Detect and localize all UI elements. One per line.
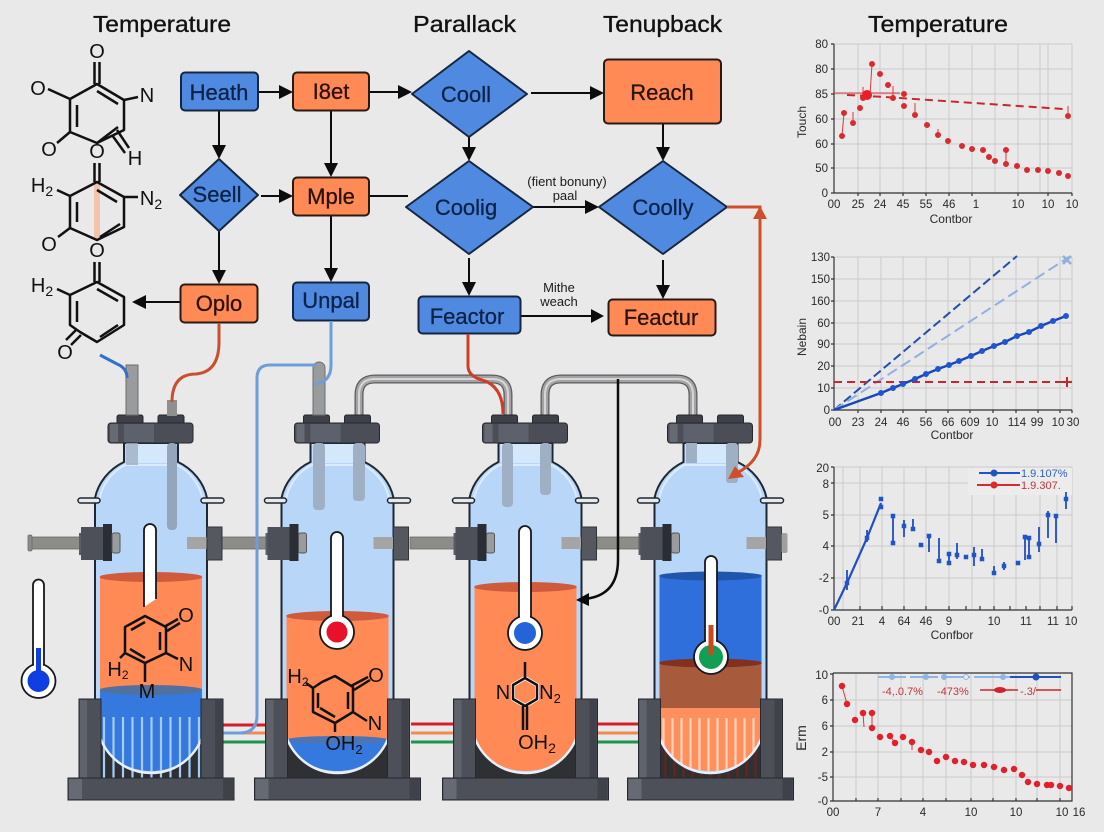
reactor 2 molecule [287,665,384,757]
chart 4 y labels: 6 [822,695,828,707]
chart 3 y labels [816,463,830,617]
label: middle note: Mithe [543,280,575,295]
chart 1 axis titles [795,106,972,226]
chart 3 x labels: 10 [1065,616,1077,628]
molecule: lower ring: H [31,275,45,297]
chart 4 x labels: 4 [920,807,927,819]
reactor 1 heater ribs [104,717,199,778]
chart 3 legend [968,468,1072,495]
chart 1 y labels: 60 [815,139,828,151]
chart 2 x labels [829,417,1079,429]
reactor 1 molecule: O [178,605,194,627]
node: mple [293,178,369,216]
node: iset [293,72,369,110]
chart 2 axes [831,257,1072,413]
chart 3 y labels: 4 [823,541,830,553]
node: coolig: Coolig [435,195,497,220]
chart 2 y labels: 10 [817,383,830,395]
node: oplo [180,284,258,322]
arrowhead: red up [753,206,767,219]
reactor 1 liquid [99,572,203,780]
node: mple: Mple [307,184,355,209]
chart 3 y labels: 5 [823,510,829,522]
chart 1 x labels: 10 [1012,199,1024,211]
chart 1 y labels: 60 [815,114,828,126]
chart 3 grid [834,467,1072,610]
chart 4: erm [793,670,1085,819]
molecule: middle ring [31,163,162,262]
flowchart [132,51,727,336]
chart 4 y labels: 10 [815,670,828,682]
chart 4 y labels: -0 [818,796,828,808]
chart 1 x labels: 45 [897,199,909,211]
node: heath: Heath [190,80,248,105]
node: reach: Reach [630,80,694,105]
node: cooll: Cooll [441,82,491,107]
chart 2 x labels: 56 [920,417,932,429]
chart 1 stems [834,64,1068,164]
chart 4 axes [830,673,1072,801]
heading: parallack: Parallack [413,11,517,37]
reactor 4 stand and vessel [628,415,794,800]
node: reach [604,60,721,124]
chart 2 axis titles: Nebain [795,318,809,356]
pipes between reactors [359,379,693,415]
chemical structures stack [30,41,162,364]
chart 1 y labels: 50 [815,163,828,175]
chart 1 y labels: 80 [815,64,828,76]
chart 1 x labels: 10 [1042,199,1054,211]
chart 3 x labels: 00 [828,616,840,628]
chart 3 y labels: -0 [819,605,829,617]
chart 1 axes [831,44,1072,196]
chart 2: nebain [795,252,1079,442]
reactor 3 molecule: OH [518,732,548,754]
label: branch note [527,174,607,203]
chart 1 y labels: 0 [822,188,828,200]
chart 3 y labels: -2 [819,573,829,585]
molecule: middle ring: 2 [45,183,53,199]
node: unpal: Unpal [302,288,360,313]
chart 4 x labels: 16 [1073,807,1085,819]
chart 4 legend: -.3/ [1020,686,1037,698]
molecule: top ring: O [30,78,46,100]
molecule: top ring: O [89,141,105,163]
chart 4 y labels: 6 [822,721,828,733]
chart 2 x labels: 10 [986,417,998,429]
chart 4 x labels: 7 [875,807,881,819]
chart 3 axis title: Confbor [931,628,973,642]
chart 1 data points [842,64,1068,176]
heading: temperature left: Temperature [93,11,231,37]
chart 4 stems [842,686,912,750]
reactor 2 molecule: 2 [355,742,363,757]
chart 1 grid [834,44,1072,193]
chart 2 y labels: 20 [817,361,830,373]
side rods [28,535,662,551]
arrow: heath to seell [212,111,226,159]
chart 1: touch [795,39,1078,226]
reactor 2 molecule: OH [325,733,355,755]
node: iset: I8et [313,79,349,104]
heading: temperature right: Temperature [868,11,1008,37]
node: unpal [293,282,369,320]
chart 4 legend [878,674,1061,698]
label: branch note: paal [553,188,577,203]
chart 1 x labels: 24 [874,199,887,211]
chart 2 grid [834,257,1072,410]
chart 2 x labels: 46 [897,417,909,429]
molecule: middle ring: H [31,175,45,197]
chart 3 x labels: 11 [1047,616,1059,628]
molecule: top ring: O [41,139,57,161]
chart 1 axis titles: Contbor [930,212,972,226]
reactor 1 stand and vessel [68,415,234,800]
connecting wires between reactors [223,724,639,742]
chart 2 axis titles: Contbor [931,428,973,442]
chart 3 data points [847,499,1066,583]
chart 2 y labels: 0 [824,405,830,417]
chart 2 x labels: 114 [1008,417,1027,429]
reactor 4 liquid [658,572,762,778]
reactor 2 tubes [313,362,365,510]
chart 2 blue series [834,316,1066,410]
chart 4 x labels: 10 [1010,807,1022,819]
chart 4 x labels: 10 [965,807,977,819]
chart 2 y labels: 90 [817,339,830,351]
chart 1 x labels: 10 [1066,199,1078,211]
chart 3 x labels: 4 [879,616,886,628]
arrow: coolig to coolly [533,200,599,214]
reactor 2 molecule: O [368,665,384,687]
molecule: middle ring: N [140,188,154,210]
node: feactur: Feactur [624,305,698,330]
chart 4 legend: -4,.0.7% [882,686,923,698]
reactor 1 molecule [107,605,194,703]
chart 3 x labels [828,616,1077,628]
reactor 1 molecule: N [179,654,193,676]
arrow: iset to cooll [369,85,412,99]
chart 1 highlight point [862,90,872,100]
label: middle note [539,280,578,309]
node: cooll [412,51,527,137]
arrow: coolig to feactor [462,258,476,296]
node: feactur [608,300,716,336]
connector: mple to coolig [369,195,408,197]
molecule: top ring [30,41,154,170]
reactor 1 tubes [126,365,177,530]
chart 4 axis title: Erm [793,725,809,751]
chart 2 x labels: 66 [942,417,954,429]
chart 3 y labels: 20 [816,463,829,475]
chart 3 x labels: 64 [898,616,911,628]
chart 1 x labels: 25 [852,199,864,211]
chart 1 x labels: 46 [943,199,955,211]
reactor 3 molecule [496,662,561,756]
chart 2 y labels: 150 [811,274,830,286]
reactor 2 molecule: 2 [302,675,309,689]
arrowhead: red into reactor 4 [728,466,744,479]
arrow: seell to oplo [212,231,226,284]
chart 3 x labels: 11 [1020,616,1032,628]
chart 3 legend: 1.9.307. [1021,480,1061,492]
node: coolly: Coolly [632,195,694,220]
molecule: top ring: N [140,85,154,107]
node: heath [181,72,258,110]
reactor 1 [68,365,234,800]
line: oplo to reactor 1 [172,323,219,402]
chart 1 y labels [815,39,828,200]
reactor 3 molecule: N [496,682,510,704]
chart 2 y labels: 60 [817,318,830,330]
chart 4 grid [833,674,1072,801]
chart 2 x labels: 30 [1067,417,1079,429]
reactor 1 molecule: 2 [122,668,129,682]
reactor 2 thermometer [320,532,354,649]
node: oplo: Oplo [196,291,242,316]
arrow: mple to unpal [324,216,338,282]
chart 2 red baseline [834,377,1072,387]
chart 4 x labels: 00 [827,807,839,819]
chart 3 x labels: 46 [920,616,932,628]
chart 4 x labels [827,807,1085,819]
arrow: feactor to feactur [521,309,604,323]
arrowhead: black into reactor 3 [576,593,589,606]
chart 4 data points [842,686,1069,788]
line: blue hook on reactor 1 [100,355,127,378]
chart 3 x labels: 21 [852,616,864,628]
line: reactor 2 tube to wire [224,365,316,733]
thermometer: outside left [22,580,56,698]
reactor 4 thermometer [694,556,728,674]
chart 1 x labels [828,199,1078,211]
chart 4 y labels: -5 [818,772,828,784]
arrow: heath to iset [258,85,293,99]
reactor 3 tubes [502,443,551,507]
arrow: cooll to coolig [462,137,476,161]
chart 3 legend: 1.9.107% [1021,468,1068,480]
chart 2 x labels: 10 [1052,417,1064,429]
chart 2 dashed lines [834,256,1071,410]
line: unpal to reactor 2 [315,321,331,384]
chart 2 y labels: 130 [811,252,830,264]
chart 3: confbor [816,463,1077,642]
molecule: middle ring: 2 [154,196,162,212]
reactor 3 thermometer [508,526,542,650]
chart 3 axes [831,467,1072,610]
signal lines to reactors [100,207,760,733]
molecule: top ring: H [128,148,142,170]
molecule: middle ring: O [89,240,105,262]
label: middle note: weach [539,294,578,309]
molecule: lower ring [31,262,124,364]
chart 2 x labels: 99 [1031,417,1043,429]
node: feactor [418,296,520,334]
node: seell: Seell [193,182,241,207]
chart 2 axis titles [795,318,973,442]
reactor 4 [628,415,794,800]
chart 2 x labels: 609 [960,417,980,429]
reactor 2 stand and vessel [254,415,420,800]
molecule: middle ring: O [41,234,57,256]
chart 2 x labels: 00 [829,417,841,429]
reactor 3 molecule: 2 [554,691,561,706]
reactor 3 liquid [474,582,578,777]
node: coolly [599,161,727,254]
molecule: lower ring: 2 [45,283,53,299]
chart 4 legend: -473% [937,686,969,698]
reactor 3 stand and vessel [442,415,608,800]
node: coolig [406,161,533,254]
reactor 4 tubes [686,443,738,483]
chart 3 line segment [834,503,881,610]
chart 2 y labels [811,252,830,417]
chart 3 error stems [847,492,1066,590]
chart 3 x labels: 10 [988,616,1000,628]
chart 2 x labels: 24 [875,417,888,429]
chart 2 y labels: 160 [811,296,830,308]
reactor 1 molecule: H [107,659,122,681]
chart 2 x labels: 23 [852,417,864,429]
chart 3 x labels: 9 [946,616,952,628]
line: coolly to reactor 4 [727,207,760,474]
chart 1 y labels: 80 [815,39,828,51]
chart 1 x labels: 1 [973,199,979,211]
arrow: reach to coolly [656,124,670,161]
reactor 2 molecule: H [287,666,302,688]
chart 1 axis titles: Touch [795,106,809,138]
chart 4 x labels: 10 [1056,807,1068,819]
node: feactor: Feactor [430,304,504,329]
arrow: seell to mple [261,189,293,203]
label: branch note: (fient bonuny) [527,174,607,189]
reactor 3 molecule: N [539,682,554,704]
chart 1 x labels: 00 [828,199,840,211]
arrow: cooll to reach [531,86,604,100]
chart 4 y labels: 2 [822,747,828,759]
reactor 2 molecule: N [368,713,382,735]
reactor 3 molecule: 2 [548,740,556,756]
arrow: oplo to molecule [132,295,180,309]
chart 1 dashed trend [847,95,1063,109]
reactor 3 [442,415,608,800]
reactor 2 [254,362,420,800]
chart 1 y labels: 85 [815,89,828,101]
molecule: lower ring: O [57,342,73,364]
chart 1 x labels: 55 [920,199,932,211]
arrow: black return to reactor 3 [584,379,618,599]
arrow: iset to mple [324,111,338,177]
heading: tenupback: Tenupback [603,11,723,37]
line: feactor to reactor 3 [468,334,503,414]
molecule: top ring: O [89,41,105,63]
node: seell [180,159,258,231]
reactor 2 liquid [286,611,390,780]
chart 4 y labels [815,670,828,808]
reactor 1 molecule: M [139,681,155,703]
arrow: coolly to feactur [656,260,670,299]
reactor 1 thermometer [144,524,156,607]
chart 3 y labels: 8 [823,479,829,491]
